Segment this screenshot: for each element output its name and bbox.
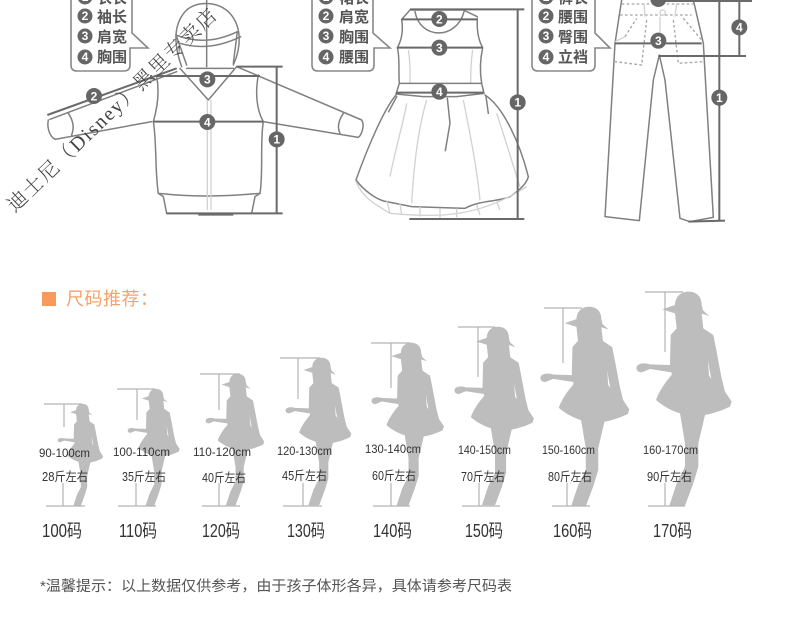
marker 3: 3 [655, 34, 662, 48]
marker 4 [731, 19, 747, 35]
dress list item 3: 胸围 [339, 29, 369, 46]
dress list item 2 [318, 8, 369, 26]
heading: size recommendation: 尺码推荐： [66, 289, 158, 309]
figure: size 100: 90-100cm [39, 446, 90, 460]
figure: size 160 [540, 307, 629, 541]
marker 2 [650, 0, 666, 7]
trousers list item 4: 立裆 [558, 48, 588, 66]
jacket list item 2 [78, 8, 127, 26]
trousers list item 4: 4 [543, 50, 550, 64]
marker 2: 2 [91, 89, 98, 103]
jacket list item 4: 胸围 [97, 49, 127, 66]
dress list item 4: 腰围 [339, 49, 369, 66]
panel: trousers measurement callout [532, 0, 610, 71]
figure: size 160: 160码 [553, 521, 592, 541]
figure: size 170: 170码 [653, 521, 692, 541]
figure: size 140: 60斤左右 [372, 468, 416, 483]
figure: size 100: 28斤左右 [42, 469, 88, 484]
marker 1: 1 [514, 96, 521, 110]
figure: size 130 [277, 358, 351, 541]
jacket list item 4: 4 [82, 50, 89, 64]
figure: size 160: 150-160cm [542, 443, 595, 457]
dress list item 1 [318, 0, 369, 7]
icon: trousers sketch with measurements [605, 0, 752, 222]
marker 1: 1 [273, 133, 280, 147]
figure: size 170: 90斤左右 [647, 469, 692, 484]
jacket list item 3: 3 [82, 29, 89, 43]
trousers list item 1 [538, 0, 588, 7]
marker 4: 4 [436, 85, 443, 99]
figure: size 150: 140-150cm [458, 443, 511, 457]
marker 3 [199, 71, 215, 87]
marker 1 [269, 131, 285, 147]
jacket list item 2: 袖长 [97, 8, 127, 26]
figure: size 100: 100码 [42, 521, 82, 541]
trousers list item 2: 2 [543, 9, 550, 23]
figure: size 120 [193, 374, 264, 541]
figure: size 160: 80斤左右 [548, 469, 592, 484]
marker 1: 1 [716, 91, 723, 105]
panel: dress measurement callout [312, 0, 390, 71]
dress list item 3 [318, 28, 369, 46]
jacket list item 4 [78, 49, 127, 66]
figure: size 140: 140码 [373, 521, 412, 541]
marker 3: 3 [436, 41, 443, 55]
figure: size 120: 40斤左右 [202, 470, 246, 485]
marker 3 [431, 40, 447, 56]
figure: size 170: 160-170cm [643, 443, 698, 457]
dress list item 2: 2 [323, 9, 330, 23]
marker 1 [711, 90, 727, 106]
marker 4: 4 [204, 115, 211, 129]
figure: size 150: 70斤左右 [461, 469, 505, 484]
figure: size 170 [636, 292, 732, 541]
marker 3 [650, 33, 666, 49]
trousers list item 3: 臀围 [558, 29, 588, 46]
dress list item 3: 3 [323, 29, 330, 43]
marker 2: 2 [436, 12, 443, 26]
trousers list item 2 [538, 8, 588, 26]
figure: size 110: 35斤左右 [122, 469, 166, 484]
figure: size 140 [365, 343, 444, 541]
trousers list item 3 [538, 28, 588, 46]
marker 3: 3 [204, 73, 211, 87]
figure: size 150: 150码 [465, 521, 503, 541]
figure: size 100 [39, 404, 103, 541]
dress list item 4 [318, 49, 369, 66]
figure: size 140: 130-140cm [365, 442, 421, 456]
figure: size 110: 110码 [119, 521, 157, 541]
marker 4 [199, 114, 215, 130]
marker 2 [431, 11, 447, 27]
marker 4 [431, 84, 447, 100]
icon: jacket sketch with measurements [47, 0, 363, 215]
footnote: *温馨提示：以上数据仅供参考，由于孩子体形各异，具体请参考尺码表 [40, 578, 513, 595]
figure: size 130: 45斤左右 [282, 468, 327, 483]
panel: jacket measurement callout [71, 0, 148, 71]
trousers list item 3: 3 [543, 29, 550, 43]
marker 4: 4 [736, 21, 743, 35]
figure: size 130: 120-130cm [277, 444, 332, 458]
jacket list item 3 [78, 28, 127, 46]
jacket list item 3: 肩宽 [97, 28, 127, 46]
jacket list item 2: 2 [82, 9, 89, 23]
figure: size 130: 130码 [287, 521, 325, 541]
trousers list item 4 [538, 48, 588, 66]
marker 2 [86, 88, 102, 104]
figure: size 120: 110-120cm [193, 445, 251, 459]
icon: dress sketch with measurements [356, 9, 528, 219]
dress list item 4: 4 [323, 50, 330, 64]
watermark: 迪士尼（Disney）黑里专卖店 [2, 4, 221, 217]
figure: size 110 [113, 389, 180, 541]
jacket list item 1 [78, 0, 127, 7]
icon: orange square [42, 292, 56, 306]
figure: size 120: 120码 [202, 521, 240, 541]
trousers list item 2: 腰围 [558, 9, 588, 26]
figure: size 150 [455, 327, 534, 541]
marker 1 [510, 94, 526, 110]
dress list item 2: 肩宽 [339, 8, 369, 26]
figure: size 110: 100-110cm [113, 445, 170, 459]
